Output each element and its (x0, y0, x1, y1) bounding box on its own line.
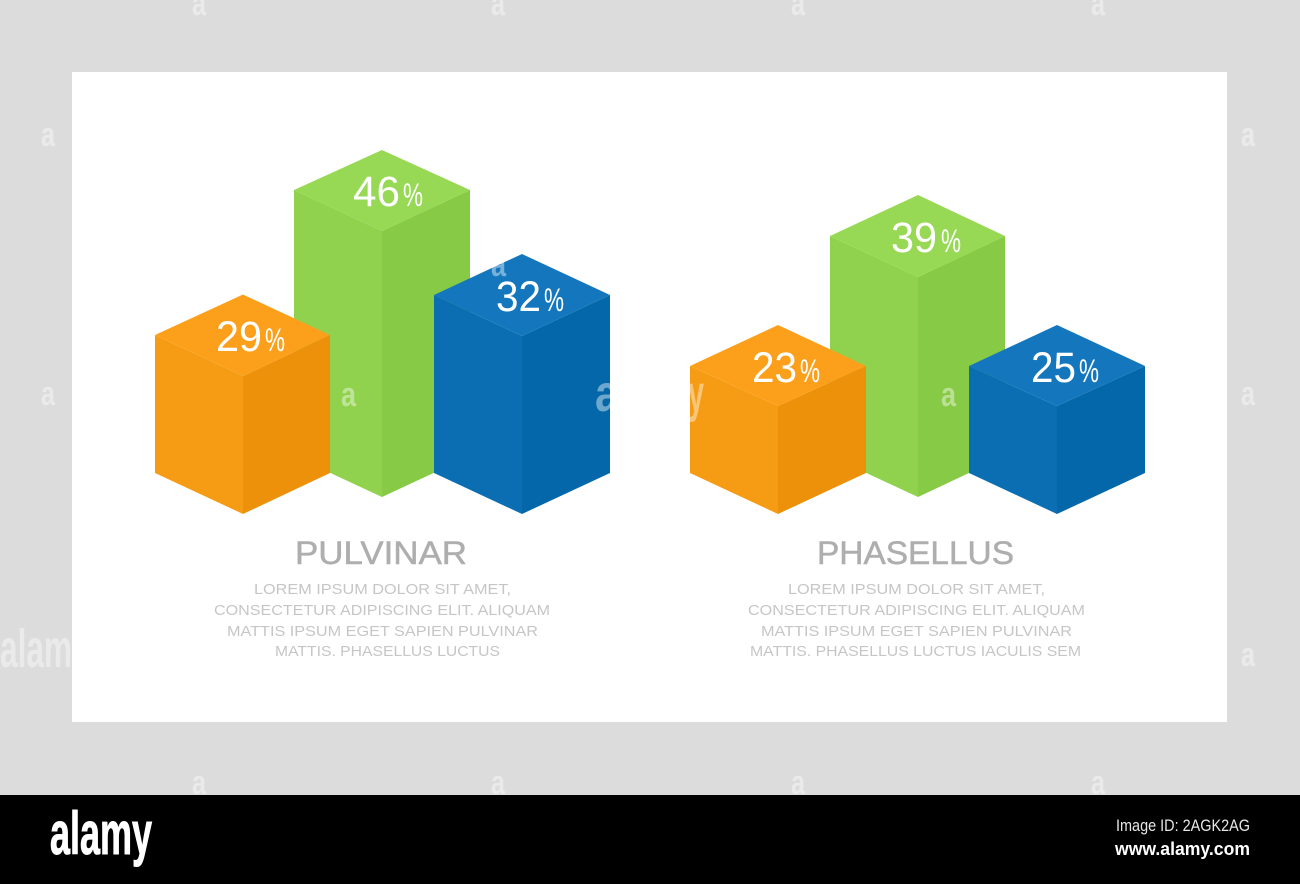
image id: Image ID: 2AGK2AG (1116, 816, 1250, 835)
watermark letters: a (791, 764, 806, 802)
text block: pulvinar description (214, 581, 550, 660)
bar: blue 25%: 25 (1031, 344, 1076, 392)
bar: orange 23%: % (800, 353, 820, 389)
watermark letters: a (341, 376, 357, 414)
bar: orange 29% (155, 294, 330, 514)
chart: phasellus (690, 195, 1145, 514)
bar: blue 32% (434, 254, 610, 514)
bar: blue 32%: 32 (496, 273, 541, 321)
text block: phasellus description: MATTIS. PHASELLUS LUCTUS IACULIS SEM (750, 643, 1081, 660)
text block: phasellus description: CONSECTETUR ADIPISCING ELIT. ALIQUAM (748, 602, 1085, 619)
bar: green 46%: 46 (353, 168, 400, 216)
bar: green 46%: % (403, 177, 423, 213)
bar: green 39%: % (941, 223, 961, 259)
watermark letters: a (41, 375, 56, 413)
heading: phasellus: PHASELLUS (817, 535, 1014, 571)
white panel (72, 72, 1227, 722)
watermark letters: a (192, 764, 207, 802)
chart: pulvinar (155, 150, 610, 514)
text block: pulvinar description: MATTIS IPSUM EGET SAPIEN PULVINAR (227, 623, 538, 640)
bar: green 46% (294, 150, 470, 497)
watermark letters: a (941, 376, 957, 414)
watermark letters: a (1241, 375, 1256, 413)
watermark letters: a (1241, 636, 1256, 674)
watermark letters: a (491, 764, 506, 802)
bar: blue 25%: % (1079, 353, 1099, 389)
watermark letters: a (595, 365, 620, 423)
bar: orange 29%: 29 (216, 313, 262, 361)
bar: blue 25% (969, 325, 1145, 514)
text block: phasellus description: LOREM IPSUM DOLOR SIT AMET, (788, 581, 1045, 598)
text block: pulvinar description: CONSECTETUR ADIPISCING ELIT. ALIQUAM (214, 602, 550, 619)
text block: phasellus description: MATTIS IPSUM EGET SAPIEN PULVINAR (761, 623, 1072, 640)
website: www.alamy.com (1114, 839, 1250, 859)
bar: blue 32%: % (544, 282, 564, 318)
watermark letters: a (1241, 116, 1256, 154)
bar: green 39% (830, 195, 1005, 497)
text block: pulvinar description: MATTIS. PHASELLUS LUCTUS (275, 643, 500, 660)
watermark letters: a (41, 116, 56, 154)
bar: orange 23% (690, 325, 866, 514)
footer bar (0, 795, 1300, 884)
logo: alamy: alamy (50, 800, 152, 867)
bar: orange 23%: 23 (752, 344, 797, 392)
bar: orange 29%: % (265, 322, 285, 358)
text block: pulvinar description: LOREM IPSUM DOLOR SIT AMET, (254, 581, 511, 598)
text block: phasellus description (748, 581, 1085, 660)
heading: pulvinar: PULVINAR (295, 535, 467, 571)
watermark letters: alam (0, 619, 72, 679)
bar: green 39%: 39 (891, 214, 937, 262)
watermark letters: a (1091, 764, 1106, 802)
watermark letters: a (491, 246, 507, 284)
watermark letters: y (688, 365, 704, 423)
